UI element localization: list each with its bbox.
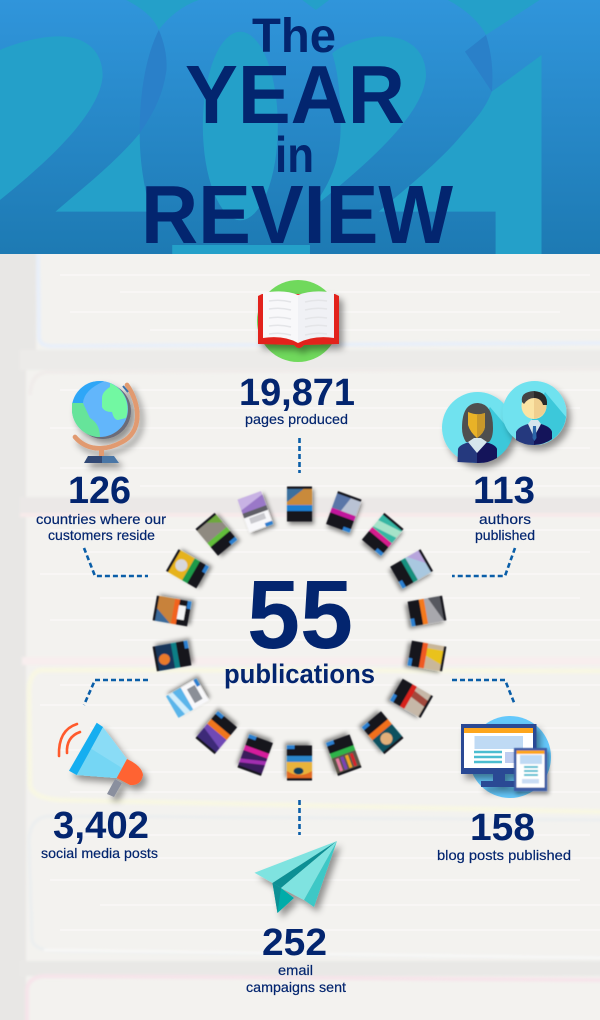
cover 15: [153, 596, 191, 626]
label: countries: customers reside: [48, 527, 155, 543]
number: 3,402: 3,402: [53, 805, 149, 847]
stat: social media: [41, 723, 158, 861]
connector: lower right: [452, 680, 515, 705]
title: in: [275, 127, 314, 183]
stat: authors: [442, 381, 566, 543]
icon: globe: [72, 381, 137, 463]
cover 11: [237, 734, 273, 776]
number: 252: 252: [262, 922, 327, 964]
connector: upper right: [452, 548, 515, 576]
cover 6: [408, 641, 446, 671]
cover 1: [287, 486, 312, 522]
stat: email campaigns: [246, 841, 346, 995]
number: 55: 55: [247, 560, 353, 669]
title: REVIEW: [141, 168, 454, 261]
label: email campaigns sent: [246, 962, 346, 995]
label: social media posts: social media posts: [41, 845, 158, 861]
centre stat: publications: [224, 560, 375, 689]
icon: two people: [442, 381, 566, 463]
icon: paper plane: [254, 841, 337, 913]
cover 13: [166, 679, 209, 718]
cover 12: [195, 711, 237, 754]
cover 14: [153, 641, 191, 671]
icon: monitor and tablet: [461, 716, 551, 798]
label: publications: publications: [224, 659, 375, 689]
label: pages produced: pages produced: [245, 411, 348, 427]
cover 5: [408, 596, 446, 626]
title: The: [252, 10, 336, 63]
cover 3: [362, 513, 404, 556]
label: email campaigns sent: email: [278, 962, 313, 978]
ring of book covers: [153, 486, 446, 780]
connector: top: [298, 438, 301, 473]
icon: megaphone: [59, 723, 143, 797]
stat: blog posts: [437, 716, 571, 863]
number: 113: 113: [473, 470, 535, 512]
cover 8: [362, 711, 404, 754]
connector: bottom: [298, 800, 301, 835]
connector: lower left: [84, 680, 148, 705]
label: countries: countries where our: [36, 511, 166, 527]
label: authors published: published: [475, 527, 535, 543]
cover 17: [195, 513, 237, 556]
large faded 2021 backdrop: [0, 0, 542, 254]
cover 2: [326, 491, 362, 533]
cover 18: [237, 491, 273, 533]
number: 158: 158: [470, 807, 535, 849]
number: 126: 126: [68, 470, 131, 512]
header banner: [0, 0, 600, 261]
label: authors published: [475, 511, 535, 543]
cover 10: [287, 746, 312, 780]
stat: pages produced: [239, 280, 355, 427]
title: YEAR: [185, 48, 405, 141]
label: blog posts published: blog posts published: [437, 847, 571, 863]
label: email campaigns sent: campaigns sent: [246, 979, 346, 995]
stat: countries: [36, 381, 166, 543]
cover 9: [326, 734, 362, 776]
cover 7: [390, 679, 433, 718]
cover 4: [390, 549, 433, 588]
label: countries: [36, 511, 166, 543]
title: [141, 10, 454, 261]
cover 16: [166, 549, 209, 588]
icon: open book: [257, 280, 339, 362]
number: 19,871: 19,871: [239, 372, 355, 414]
connector: upper left: [84, 548, 148, 576]
label: authors published: authors: [479, 511, 531, 527]
book stack background: [0, 250, 600, 1020]
